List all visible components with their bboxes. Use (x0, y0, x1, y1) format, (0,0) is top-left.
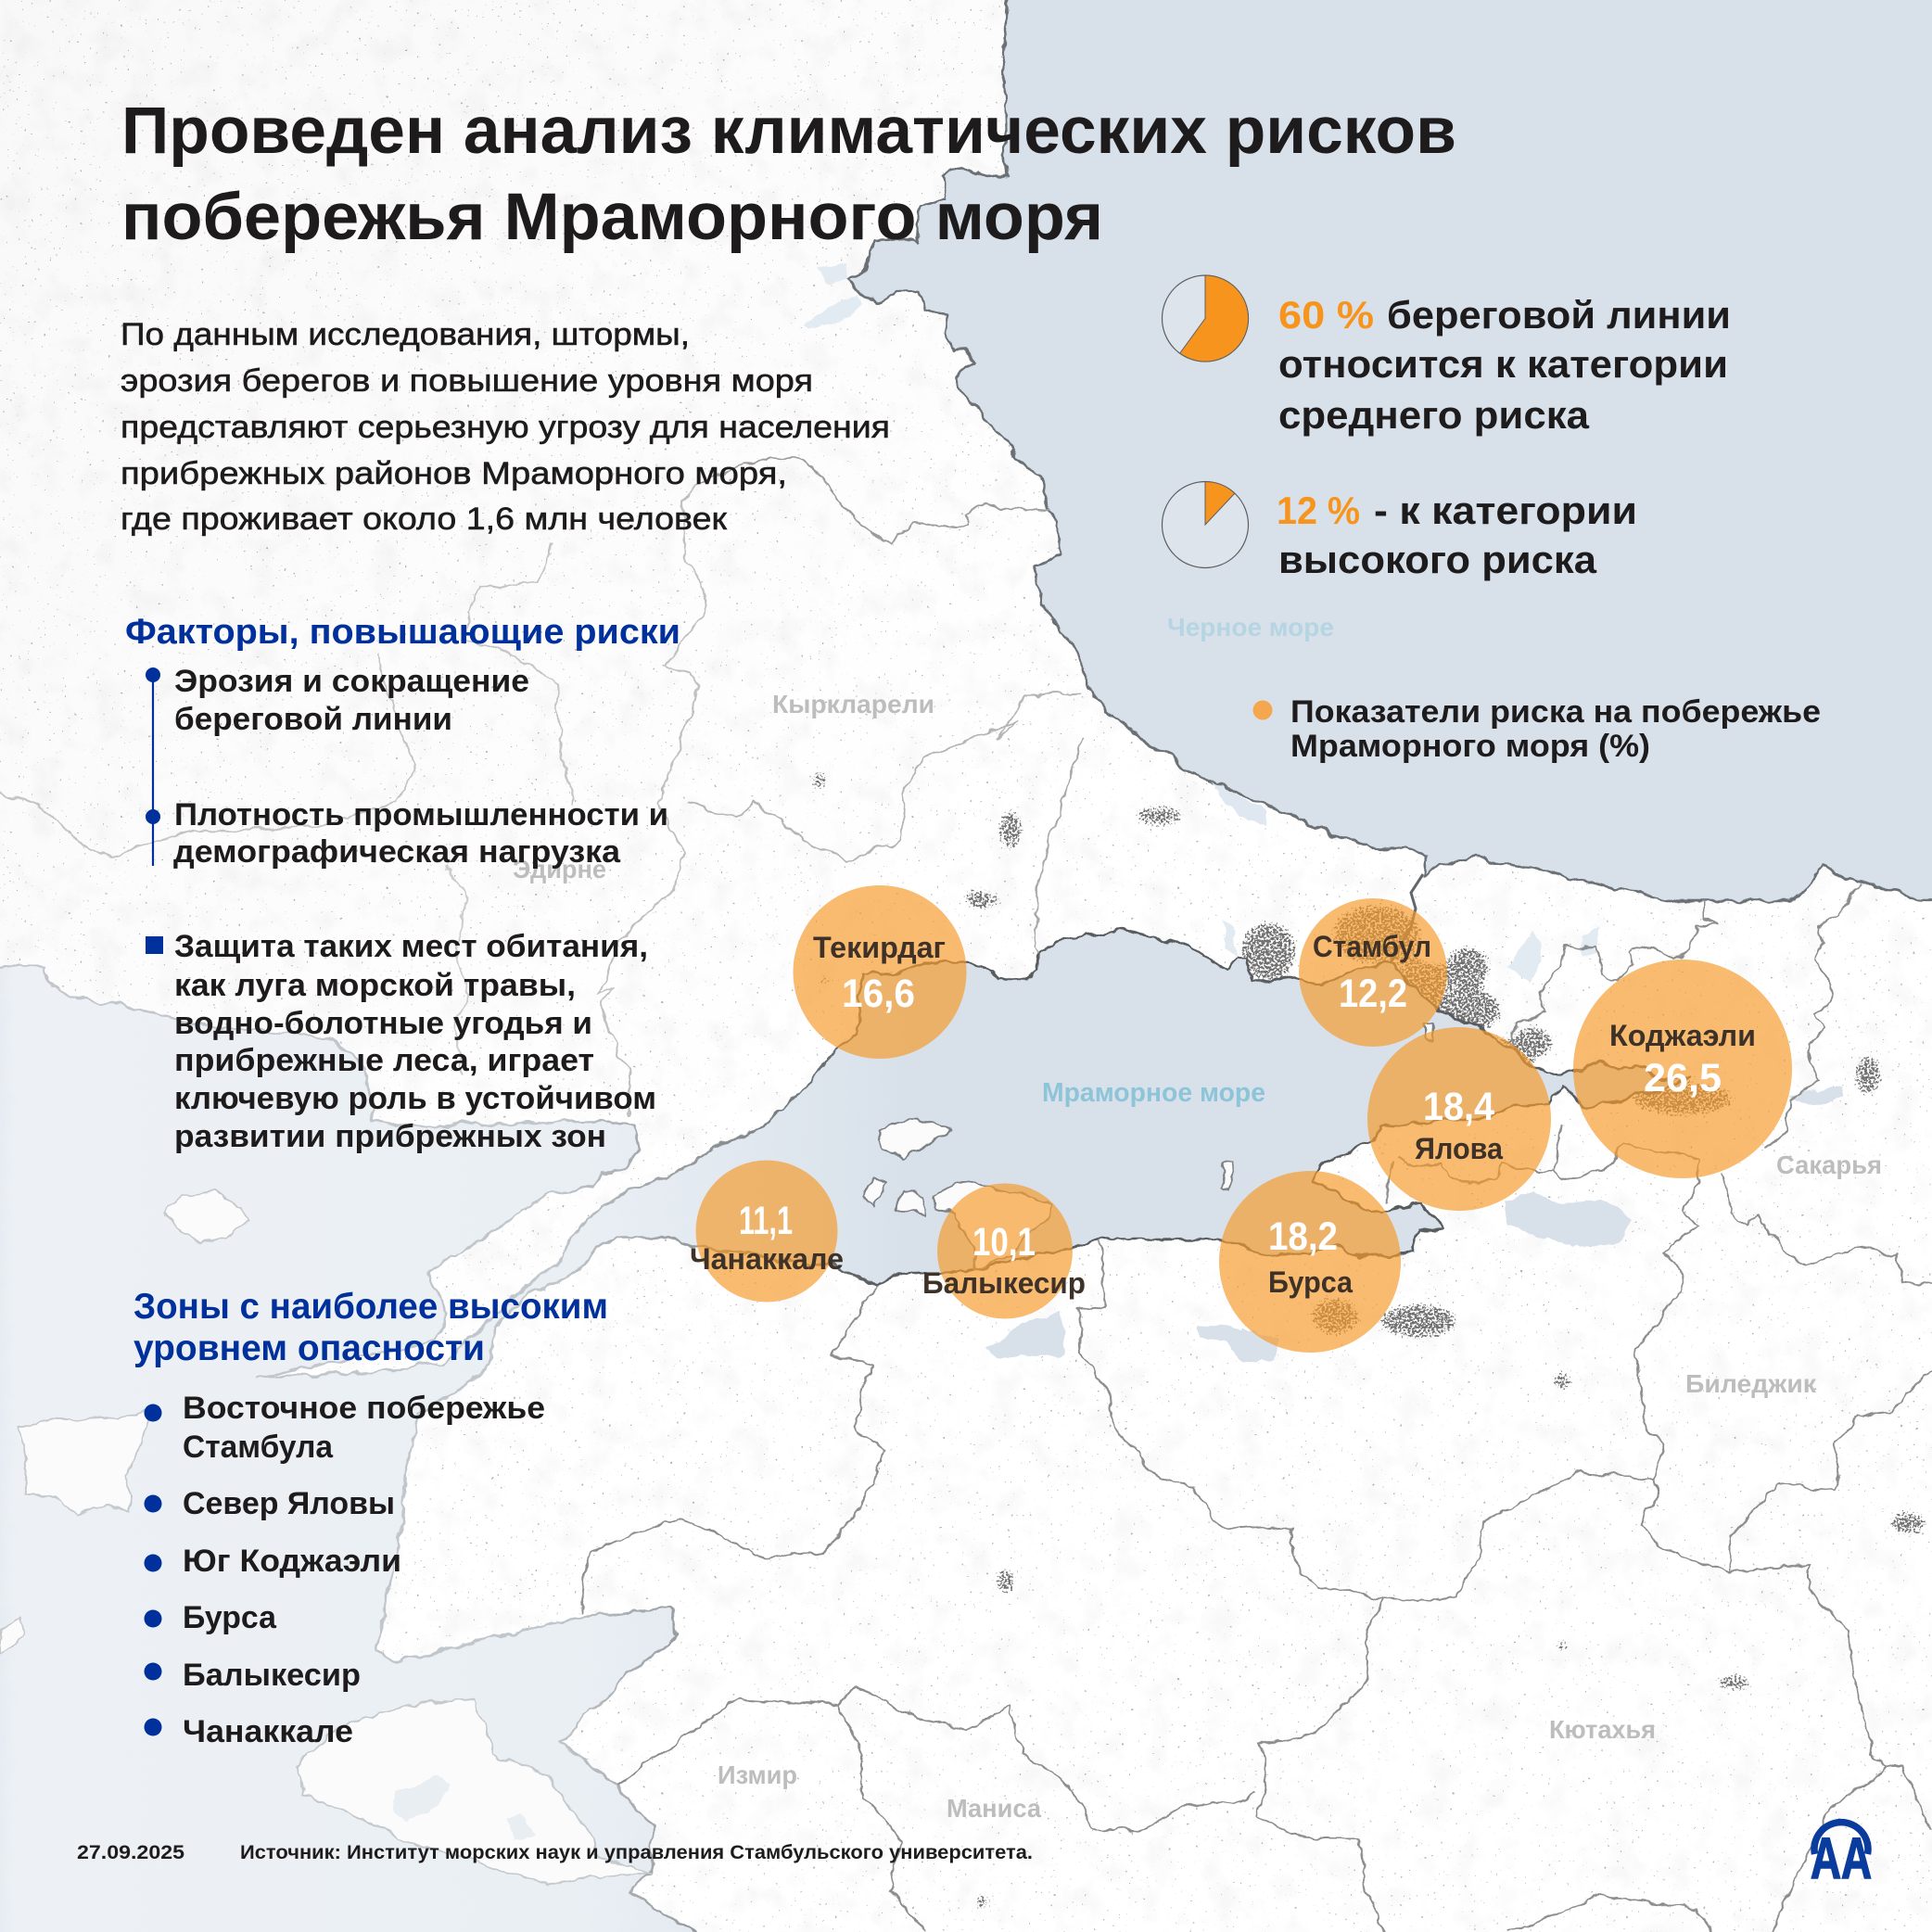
factor: habitat protection: прибрежные леса, играет (174, 1043, 594, 1078)
bubble label: Текирдаг 16,6 (813, 931, 946, 1016)
bubble label: Текирдаг 16,6: 16,6 (842, 972, 915, 1016)
map label: Мраморное море: Мраморное море (1042, 1078, 1265, 1108)
panel: factors (125, 613, 680, 1154)
factor: industry density (173, 797, 668, 870)
list items: Чанаккале (183, 1714, 353, 1749)
pie chart: 12 percent (1163, 482, 1248, 567)
factor: erosion: Эрозия и сокращение (174, 664, 529, 699)
factor: habitat protection: Защита таких мест обитания, (174, 929, 648, 964)
intro text: прибрежных районов Мраморного моря, (121, 456, 787, 491)
list items (183, 1391, 545, 1749)
heading: factors: Факторы, повышающие риски (125, 613, 680, 652)
urban areas (760, 768, 1930, 1913)
sea: Black Sea (848, 0, 1932, 905)
bubble: Текирдаг (794, 885, 966, 1059)
Lesbos bays and lakes (394, 265, 1844, 1840)
bubble label: Балыкесир 10,1: 10,1 (972, 1220, 1036, 1265)
square bullet (146, 936, 163, 954)
list items: Север Яловы (183, 1486, 395, 1521)
factor: industry density: Плотность промышленности и (174, 797, 668, 833)
list items: Стамбула (183, 1430, 334, 1465)
bubble label: Ялова 18,4 (1415, 1085, 1503, 1165)
factor: habitat protection: развитии прибрежных зон (174, 1119, 606, 1154)
heading: zones: уровнем опасности (133, 1328, 485, 1368)
title: Проведен анализ климатических рисков (121, 95, 1456, 168)
bubble label: Бурса 18,2 (1268, 1214, 1353, 1299)
bubble label: Ялова 18,4: Ялова (1415, 1132, 1503, 1165)
legend: Показатели риска на побережье (1290, 694, 1821, 730)
bubble label: Текирдаг 16,6: Текирдаг (813, 931, 946, 964)
bubble: Ялова (1367, 1027, 1551, 1211)
stat text: 60 percent: среднего риска (1278, 393, 1590, 437)
bubble label: Балыкесир 10,1: Балыкесир (922, 1266, 1086, 1300)
footer date: 27.09.2025 (77, 1842, 184, 1863)
heading: zones: Зоны с наиболее высоким (133, 1287, 608, 1327)
intro text: эрозия берегов и повышение уровня моря (121, 363, 813, 399)
legend (1253, 694, 1821, 764)
stat text: 12 percent: 12 % (1277, 489, 1360, 532)
bubble label: Коджаэли 26,5 (1609, 1019, 1756, 1100)
map label: Кыркларели: Кыркларели (772, 690, 934, 718)
icon: AA logo (1811, 1823, 1872, 1891)
stat text: 60 percent: 60 % (1278, 293, 1374, 337)
title: побережья Мраморного моря (121, 181, 1103, 254)
map label: Черное море: Черное море (1167, 613, 1334, 642)
list items: Бурса (183, 1600, 277, 1635)
factor: erosion (174, 664, 529, 737)
stat text: 60 percent: береговой линии (1387, 293, 1731, 337)
stat text: 12 percent (1277, 489, 1637, 581)
stat text: 12 percent: - к категории (1374, 489, 1637, 532)
icon: AA logo: AA (1811, 1826, 1872, 1891)
factor: habitat protection: ключевую роль в устойчивом (174, 1081, 656, 1116)
bubble: Стамбул (1299, 898, 1447, 1047)
bubble: Чанаккале (695, 1161, 838, 1302)
factor: habitat protection (174, 929, 656, 1154)
stat text: 60 percent (1278, 293, 1731, 437)
heading: zones (133, 1287, 608, 1368)
bubble: Коджаэли (1573, 960, 1792, 1178)
bubble label: Стамбул 12,2: Стамбул (1313, 930, 1431, 963)
timeline line (152, 675, 154, 866)
map label: Маниса: Маниса (947, 1794, 1041, 1823)
timeline dot 1 (146, 667, 160, 682)
bubble: Бурса (1219, 1171, 1401, 1353)
map label: Кютахья: Кютахья (1549, 1715, 1656, 1744)
bubble label: Ялова 18,4: 18,4 (1423, 1085, 1494, 1129)
bubble label: Чанаккале 11,1: 11,1 (739, 1199, 793, 1243)
intro text: представляют серьезную угрозу для населения (121, 410, 890, 445)
map label: Биледжик: Биледжик (1685, 1369, 1817, 1398)
panel: high danger zones (133, 1287, 608, 1749)
map label: Сакарья: Сакарья (1776, 1150, 1882, 1179)
stat text: 12 percent: высокого риска (1278, 538, 1597, 581)
list items: Юг Коджаэли (183, 1544, 401, 1579)
islands (0, 1023, 1435, 1884)
sea: Aegean, Dardanelles and Sea of Marmara (0, 930, 1690, 1932)
map label: Эдирне: Эдирне (513, 855, 606, 883)
Bosphorus (1391, 874, 1423, 962)
bubble label: Стамбул 12,2: 12,2 (1339, 972, 1407, 1016)
bubble label: Коджаэли 26,5: Коджаэли (1609, 1019, 1756, 1052)
bubble label: Бурса 18,2: 18,2 (1268, 1214, 1338, 1259)
bubble label: Балыкесир 10,1 (922, 1220, 1086, 1300)
intro text: где проживает около 1,6 млн человек (121, 502, 728, 537)
bubble label: Бурса 18,2: Бурса (1268, 1265, 1353, 1299)
province borders (0, 457, 1932, 1932)
title (121, 95, 1456, 254)
bubble label: Чанаккале 11,1: Чанаккале (690, 1242, 844, 1276)
risk bubbles (695, 885, 1792, 1353)
factor: habitat protection: водно-болотные угодья и (174, 1006, 592, 1041)
list bullets (145, 1404, 161, 1735)
bubble label: Стамбул 12,2 (1313, 930, 1431, 1016)
pie chart: 60 percent (1163, 275, 1249, 362)
factor: habitat protection: как луга морской травы, (174, 968, 576, 1003)
footer source: Источник: Институт морских наук и управления Стамбульского университета. (240, 1842, 1033, 1863)
stat text: 60 percent: относится к категории (1278, 342, 1728, 386)
map label: Измир: Измир (718, 1760, 797, 1789)
intro text: По данным исследования, штормы, (121, 317, 690, 352)
legend: Мраморного моря (%) (1290, 729, 1650, 764)
list items: Восточное побережье (183, 1391, 545, 1426)
bubble: Балыкесир (937, 1183, 1073, 1318)
timeline dot 2 (146, 809, 160, 824)
bubble label: Чанаккале 11,1 (690, 1199, 844, 1276)
factor: erosion: береговой линии (174, 702, 452, 737)
list items: Балыкесир (183, 1658, 361, 1693)
factor: industry density: демографическая нагрузка (173, 834, 621, 870)
bubble label: Коджаэли 26,5: 26,5 (1644, 1056, 1722, 1100)
intro text (121, 317, 890, 537)
